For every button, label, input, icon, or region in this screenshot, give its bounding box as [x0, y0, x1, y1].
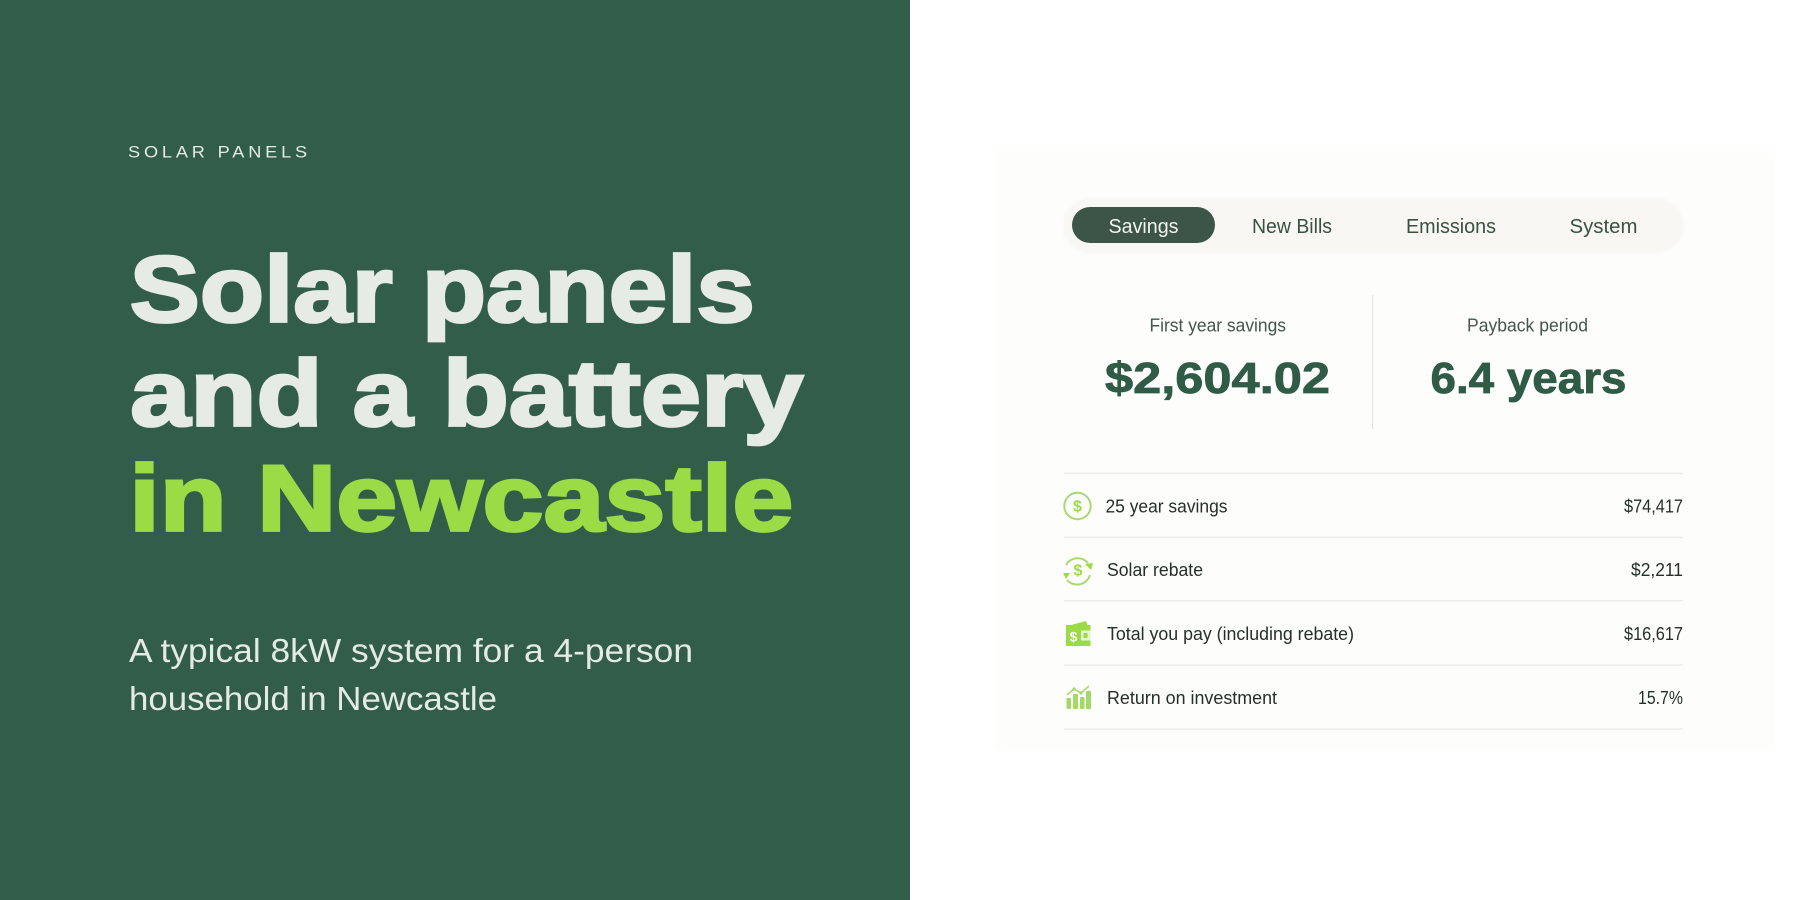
row: solar rebate	[1063, 558, 1683, 585]
stat: first year savings: First year savings	[1150, 316, 1286, 336]
stat: payback period	[1430, 316, 1626, 403]
active tab: Savings	[1072, 207, 1215, 243]
row: solar rebate: $2,211	[1631, 560, 1683, 580]
icon: dollar with circular arrows	[1063, 558, 1093, 585]
icon: dollar coin: $	[1073, 498, 1082, 516]
title: in Newcastle	[129, 446, 793, 550]
title: Solar panels	[130, 236, 755, 342]
eyebrow label: SOLAR PANELS	[128, 142, 311, 162]
stat: payback period: 6.4 years	[1430, 354, 1626, 403]
icon: dollar with circular arrows: $	[1074, 562, 1083, 580]
row: return on investment: 15.7%	[1638, 688, 1683, 708]
row: 25 year savings: 25 year savings	[1106, 496, 1228, 516]
tab bar	[1063, 198, 1684, 253]
row: total you pay: Total you pay (including rebate)	[1107, 624, 1354, 644]
tab: System: System	[1570, 216, 1638, 238]
row: 25 year savings	[1064, 493, 1683, 519]
subtitle: household in Newcastle	[129, 680, 497, 717]
panel: savings card	[993, 149, 1776, 752]
row: return on investment	[1066, 686, 1683, 709]
icon: bar chart with trend line	[1066, 686, 1091, 709]
row: 25 year savings: $74,417	[1624, 496, 1683, 516]
row: total you pay	[1066, 621, 1683, 646]
row: total you pay: $16,617	[1624, 624, 1683, 644]
title	[129, 236, 803, 550]
subtitle	[129, 632, 693, 717]
row: solar rebate: Solar rebate	[1107, 560, 1203, 580]
stat: first year savings	[1105, 316, 1330, 403]
icon: wallet	[1066, 621, 1090, 646]
icon: wallet: $	[1070, 628, 1078, 644]
subtitle: A typical 8kW system for a 4-person	[129, 632, 693, 669]
tab: New Bills: New Bills	[1252, 216, 1332, 238]
stat: first year savings: $2,604.02	[1105, 354, 1330, 403]
active tab: Savings: Savings	[1108, 216, 1178, 238]
title: and a battery	[130, 340, 803, 446]
tab: Emissions: Emissions	[1406, 216, 1496, 238]
row: return on investment: Return on investment	[1107, 688, 1277, 708]
stat: payback period: Payback period	[1467, 316, 1588, 336]
icon: dollar coin	[1064, 493, 1091, 519]
